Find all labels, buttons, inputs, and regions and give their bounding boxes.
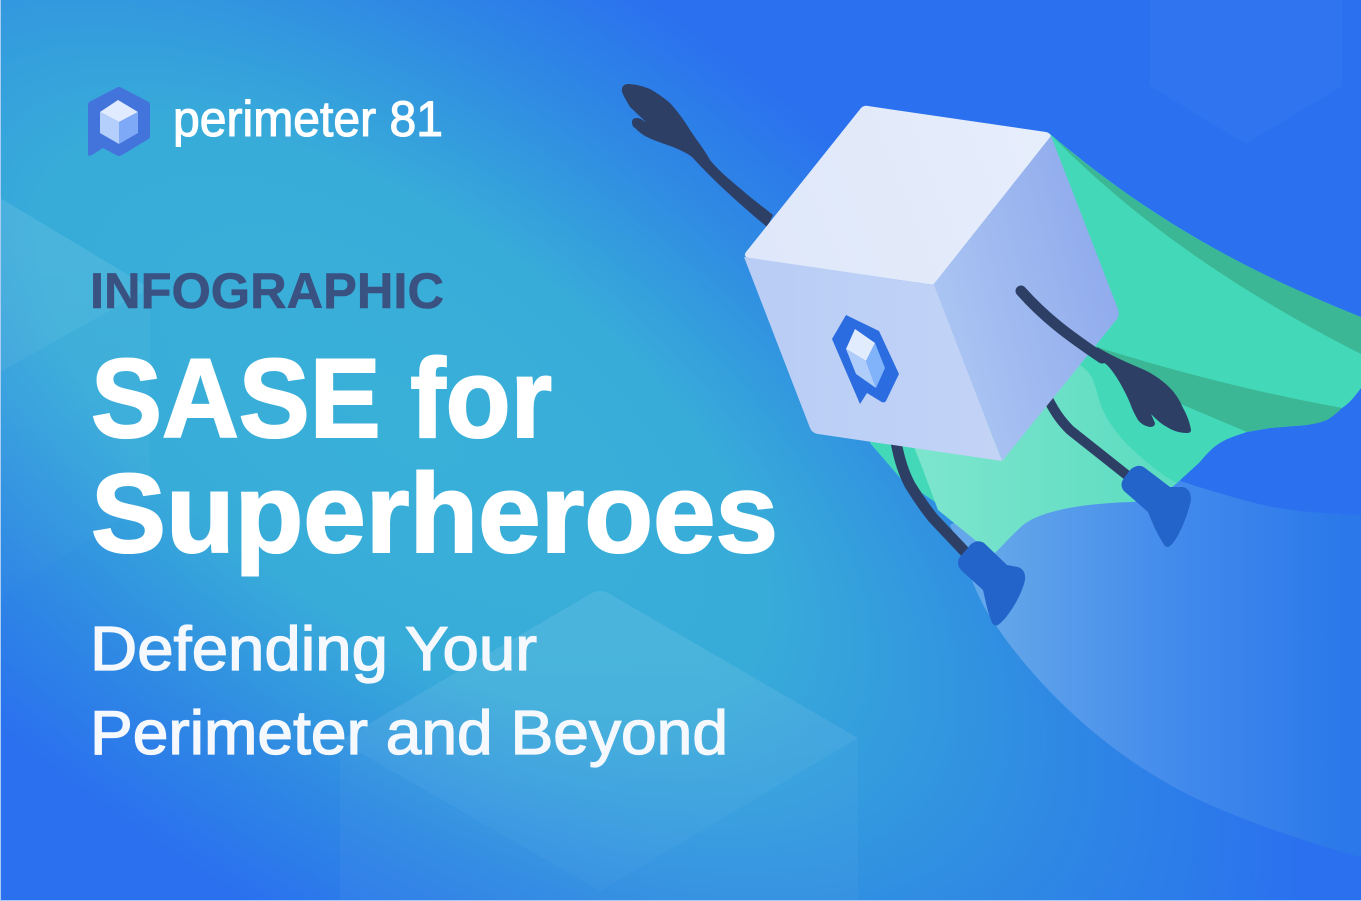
cube left face bbox=[744, 257, 1002, 461]
right arm and hand bbox=[1021, 291, 1191, 433]
cube emblem bbox=[832, 315, 899, 404]
eyebrow: INFOGRAPHIC: INFOGRAPHIC bbox=[90, 263, 444, 319]
front leg bbox=[896, 442, 966, 553]
subtitle: Defending Your bbox=[90, 615, 537, 684]
background hexagon: top right bbox=[1150, 0, 1342, 144]
title: SASE for bbox=[91, 336, 552, 461]
back boot bbox=[1122, 466, 1191, 547]
subtitle bbox=[90, 615, 728, 768]
title bbox=[91, 336, 778, 576]
cape dark fold lower bbox=[1097, 347, 1342, 432]
cape bbox=[870, 134, 1361, 553]
superhero cube mascot bbox=[622, 84, 1361, 625]
subtitle: Perimeter and Beyond bbox=[90, 699, 728, 768]
cape dark fold upper bbox=[1052, 136, 1361, 354]
background hexagon: left bbox=[0, 198, 150, 597]
back leg bbox=[1048, 399, 1128, 476]
cube right face bbox=[933, 136, 1119, 461]
cape light fold bbox=[914, 365, 1177, 553]
left arm and hand bbox=[622, 84, 773, 227]
background swoosh bbox=[950, 480, 1361, 857]
front boot bbox=[958, 541, 1025, 625]
cube top face bbox=[745, 106, 1051, 285]
logo icon bbox=[88, 87, 150, 156]
title: Superheroes bbox=[91, 451, 778, 576]
background hexagon: lower centre bbox=[340, 591, 858, 901]
logo wordmark: perimeter 81 bbox=[173, 91, 443, 147]
logo bbox=[88, 87, 443, 156]
